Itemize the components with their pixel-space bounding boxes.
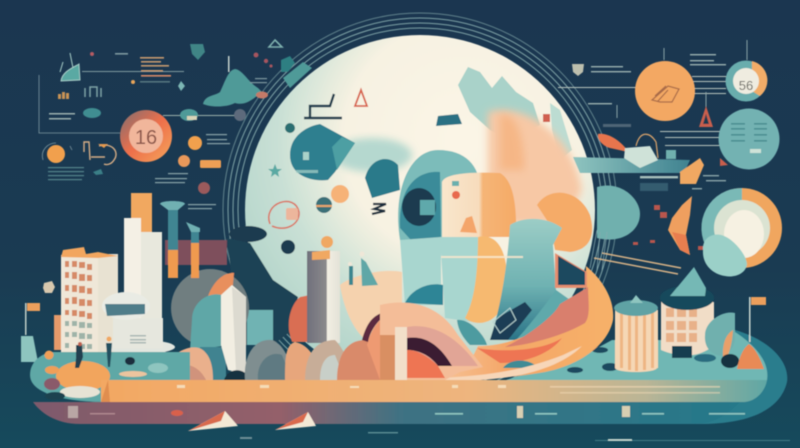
teal cloud xyxy=(703,235,747,276)
band pictogram xyxy=(68,406,78,418)
dark oval xyxy=(402,188,436,226)
maroon strip block xyxy=(165,240,227,265)
peach hill xyxy=(340,271,402,342)
red marker xyxy=(543,114,550,122)
grey square hump xyxy=(320,355,345,380)
panel: left buildings xyxy=(21,193,298,380)
orange outer swirl xyxy=(400,266,613,381)
panel: top left labels xyxy=(39,40,312,133)
donut number 16 xyxy=(120,110,172,162)
teal head bubble xyxy=(290,124,355,180)
text bars xyxy=(155,134,230,209)
orange marker xyxy=(131,80,135,84)
orange dot xyxy=(188,136,202,150)
orange map lower xyxy=(668,196,692,255)
black object xyxy=(125,357,135,365)
label tab xyxy=(187,116,197,120)
peach bottom band xyxy=(440,346,582,380)
orange column base xyxy=(465,236,507,323)
peach hump xyxy=(285,342,320,380)
teal wedge xyxy=(148,365,180,378)
number: 16 xyxy=(135,127,157,149)
ring teal sector xyxy=(701,188,742,250)
number: 56 xyxy=(739,78,753,93)
pale teal lower patch xyxy=(247,310,273,345)
dark navy wedge xyxy=(490,302,532,340)
salmon inner swirl xyxy=(505,287,589,347)
orange glow circle xyxy=(331,185,349,203)
triangle icon xyxy=(269,40,282,47)
pencil shaded side xyxy=(232,287,246,375)
coral map lower xyxy=(672,232,690,255)
right sail xyxy=(275,412,316,430)
white pencil tower xyxy=(221,285,246,375)
small label xyxy=(115,53,128,55)
pale teal ellipse xyxy=(148,363,168,373)
bar icon xyxy=(58,92,69,99)
dark patch xyxy=(45,392,65,400)
cream vertical band xyxy=(395,327,407,380)
orange circle xyxy=(635,61,695,121)
figure head two xyxy=(106,336,112,342)
orange translucent streak xyxy=(500,115,524,170)
dark tablet frame xyxy=(555,253,587,288)
teal small tab xyxy=(452,181,459,186)
coral marker xyxy=(171,410,183,416)
teal bulb xyxy=(190,294,232,350)
panel: right side infographics xyxy=(558,40,782,276)
orbit rings xyxy=(223,13,617,407)
heading bar xyxy=(640,176,678,178)
head labels xyxy=(296,152,318,173)
coral pill xyxy=(256,92,268,98)
coral hump xyxy=(337,340,392,380)
dark outer curve xyxy=(500,330,787,424)
connector lines xyxy=(558,76,726,146)
orange tower xyxy=(131,193,152,248)
lower teal shadow xyxy=(405,284,443,305)
header text lines xyxy=(588,54,726,104)
ring tab xyxy=(283,62,312,88)
hump shade xyxy=(168,365,206,380)
pale teal side patch xyxy=(550,103,572,160)
frame line xyxy=(39,75,120,133)
dark tablet xyxy=(558,256,585,285)
peach translucent cloud xyxy=(488,110,582,225)
strip text xyxy=(177,385,720,394)
text lines xyxy=(140,57,171,77)
teal head highlight xyxy=(332,137,355,170)
panel: moon contents xyxy=(268,67,592,340)
timeline line xyxy=(163,115,238,116)
stems xyxy=(617,40,747,118)
panel: platform xyxy=(30,336,790,441)
moon xyxy=(245,35,595,385)
dark wave xyxy=(407,337,452,366)
white disc xyxy=(60,386,100,398)
pale teal blob xyxy=(332,138,412,172)
coral square xyxy=(720,158,728,166)
dark teal tag xyxy=(436,114,462,126)
teal ring 56 xyxy=(726,60,767,102)
black shrub xyxy=(721,354,739,368)
map continent xyxy=(458,67,540,140)
red dot xyxy=(452,191,460,199)
antenna line xyxy=(228,56,230,72)
mid teal wedge xyxy=(517,290,570,339)
red squares xyxy=(633,205,704,250)
pale teal column base xyxy=(440,237,480,323)
triangle notch xyxy=(703,114,709,124)
pale teal lower block xyxy=(400,237,441,305)
tan block xyxy=(380,335,395,380)
loop wire xyxy=(636,134,658,158)
teal ground xyxy=(500,332,767,382)
dome building xyxy=(102,292,175,354)
inner orange mark xyxy=(460,216,477,233)
teal inner arch xyxy=(400,172,441,250)
coral phone icon xyxy=(269,201,299,228)
teal bulb base xyxy=(200,347,226,380)
teal info circle xyxy=(718,108,780,170)
info circle text xyxy=(731,123,767,153)
oval marker xyxy=(180,109,198,121)
striped cylinder xyxy=(614,295,658,372)
grey circle marker xyxy=(234,109,246,121)
teal blob label xyxy=(83,108,101,118)
orange capsule xyxy=(44,350,54,360)
teal patch on rings xyxy=(281,56,295,72)
star xyxy=(268,164,282,177)
ring cream center xyxy=(724,210,764,258)
small peach strip xyxy=(119,371,147,377)
icon: pencil in circle xyxy=(652,86,679,102)
pink layer xyxy=(407,326,478,366)
red triangle outline xyxy=(355,90,367,106)
icon: dish antenna xyxy=(60,53,80,81)
ring inner xyxy=(714,200,770,256)
dark mass on moon xyxy=(227,238,298,345)
orange strip left slope xyxy=(101,380,110,402)
shield icon xyxy=(572,64,584,76)
bottom right line xyxy=(595,440,790,441)
orange small disc xyxy=(45,366,59,374)
hexagon xyxy=(43,281,55,293)
orange strip xyxy=(101,380,767,402)
orange right blob xyxy=(537,193,592,252)
left sail xyxy=(188,411,238,431)
band xyxy=(33,402,740,424)
figure one xyxy=(75,345,83,368)
beige hump xyxy=(305,340,350,380)
second column xyxy=(186,222,200,278)
teal fish xyxy=(93,169,103,175)
teal mini hill xyxy=(457,320,487,345)
coral swoosh xyxy=(477,338,562,363)
diamond xyxy=(178,81,185,91)
caption xyxy=(603,124,631,127)
cable icon xyxy=(84,142,116,165)
flag left xyxy=(21,303,40,362)
orange cone xyxy=(737,344,764,369)
panel: right buildings xyxy=(500,267,787,424)
top robot icon xyxy=(190,44,205,60)
teal square in oval xyxy=(420,200,435,215)
teal large blob xyxy=(398,150,480,240)
white tower one xyxy=(124,218,141,358)
orange pill xyxy=(200,160,221,168)
grey circle backdrop xyxy=(171,269,249,347)
white tower two xyxy=(141,232,162,352)
large peach hump xyxy=(367,312,402,380)
red triangle xyxy=(699,106,713,127)
small teal square xyxy=(666,150,676,159)
books icon xyxy=(493,308,516,333)
orange arrow piece xyxy=(680,158,704,184)
red marks xyxy=(254,52,273,68)
tower cap xyxy=(312,250,330,260)
small teal hump xyxy=(503,360,538,368)
coral semi-circle xyxy=(289,295,312,342)
orange wedge xyxy=(208,273,234,296)
teal deep arch xyxy=(365,159,400,198)
two people xyxy=(348,252,378,286)
small red dot xyxy=(90,52,94,56)
figure two xyxy=(106,343,112,367)
grey white tower xyxy=(307,251,340,343)
large ring xyxy=(702,188,782,268)
dark arc xyxy=(362,313,385,342)
s icon xyxy=(372,204,386,214)
dark circle xyxy=(281,240,295,254)
orange circle atop xyxy=(321,236,333,248)
bottom text xyxy=(240,437,252,439)
small label two xyxy=(140,81,170,83)
tree xyxy=(705,313,735,362)
teal gradient body xyxy=(490,219,570,340)
dark shadow blobs xyxy=(172,370,250,380)
small block xyxy=(54,315,64,350)
right sail red xyxy=(275,412,308,430)
bottom left text xyxy=(368,432,398,433)
crumple block xyxy=(624,146,658,168)
maroon circle xyxy=(198,182,210,194)
left teal ground xyxy=(30,352,190,402)
flag right xyxy=(749,297,766,342)
panel: central buildings xyxy=(148,236,402,380)
left sail red xyxy=(188,411,225,431)
pale teal band xyxy=(573,157,690,173)
pale divider line xyxy=(441,256,523,258)
orange circle with ring xyxy=(47,145,65,163)
grid on dark xyxy=(590,230,607,270)
peach wave xyxy=(380,303,483,380)
mauve patch xyxy=(44,378,60,390)
coral wave xyxy=(407,350,445,378)
hump row left xyxy=(160,347,213,380)
ground blob shadows xyxy=(567,347,716,373)
sub bar xyxy=(640,183,668,191)
teal mid circle xyxy=(597,185,640,240)
coral pointer xyxy=(598,134,628,152)
line xyxy=(82,71,184,72)
grey hump inner xyxy=(258,354,292,380)
small dark circle xyxy=(285,123,295,133)
orange arrow xyxy=(98,144,108,148)
label text xyxy=(49,113,75,120)
bottom right accent xyxy=(608,439,632,441)
apartment building xyxy=(61,247,118,353)
chair icon xyxy=(304,94,342,118)
coral box xyxy=(286,208,298,220)
orange disc xyxy=(56,361,110,391)
peach upper column xyxy=(442,173,516,237)
band teal markers xyxy=(435,406,745,418)
teal mountain xyxy=(203,69,262,106)
band text xyxy=(90,413,115,414)
striped ball xyxy=(316,197,332,213)
small text xyxy=(692,175,726,189)
panel: central swirl xyxy=(380,253,613,381)
column with cap xyxy=(160,201,185,278)
dot grid xyxy=(48,167,84,180)
panel: middle left icons xyxy=(42,134,230,209)
mini text xyxy=(250,78,267,83)
dark oval on moon xyxy=(229,226,267,242)
round tower xyxy=(660,267,714,358)
double straps xyxy=(594,253,681,274)
ring arc xyxy=(42,143,72,160)
figure head xyxy=(78,342,82,346)
orange dot two xyxy=(178,155,190,167)
chart icon xyxy=(85,87,101,97)
grey humps xyxy=(245,340,292,380)
